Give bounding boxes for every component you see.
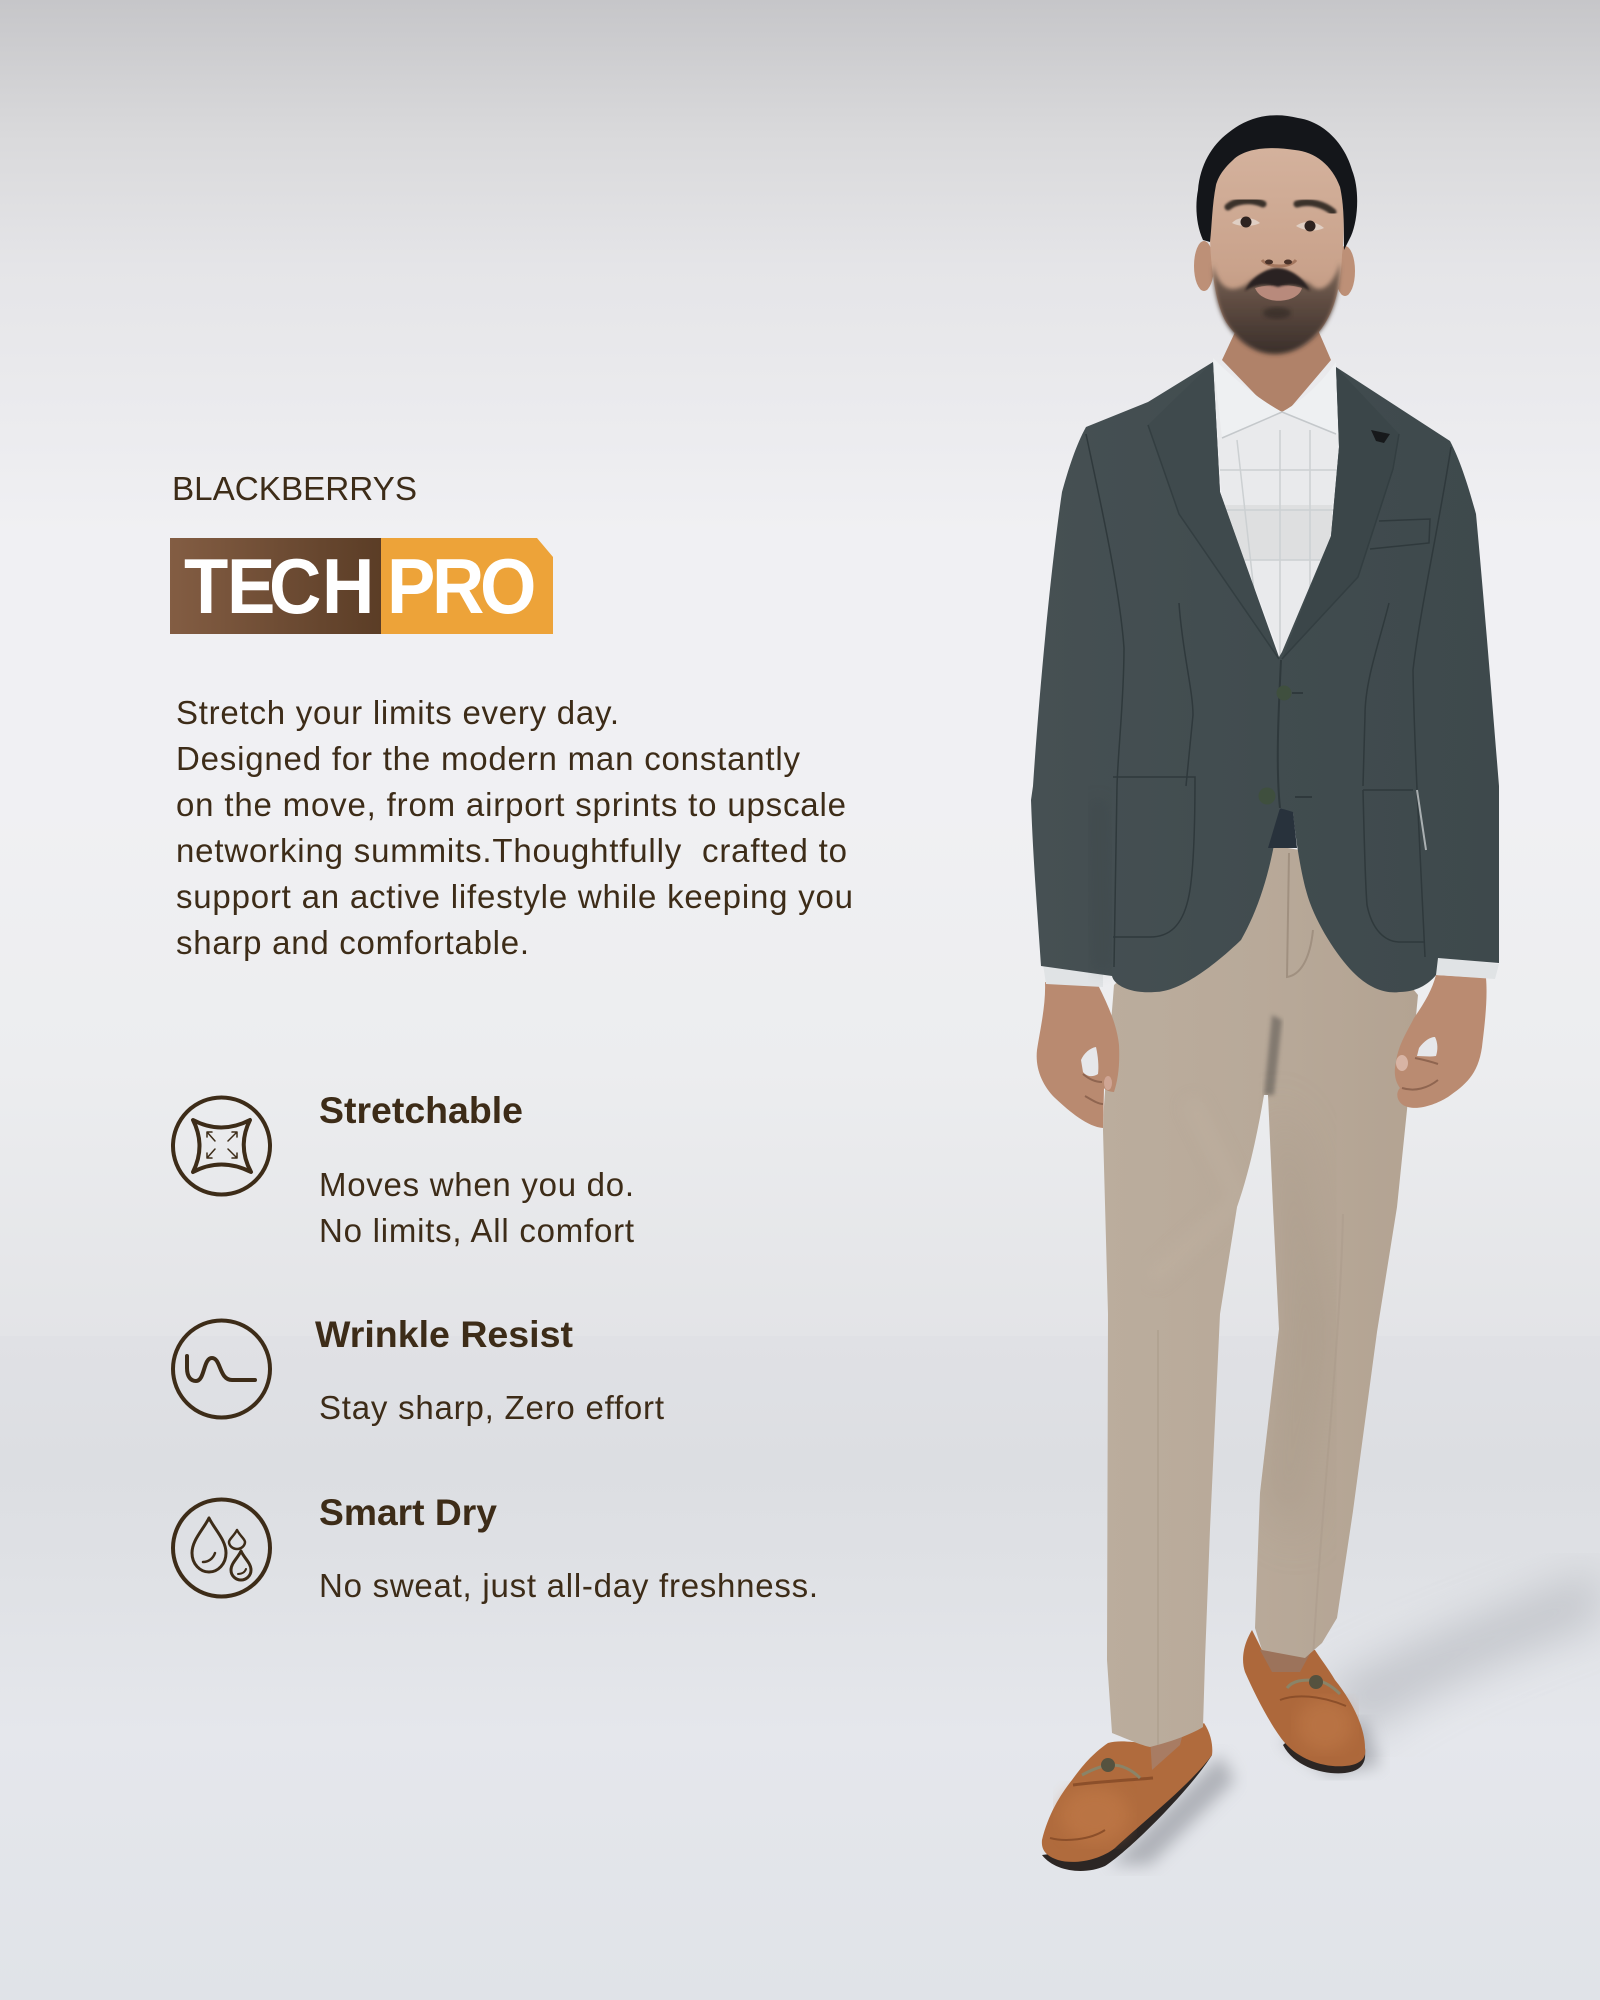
intro paragraph: networking summits.Thoughtfully crafted to <box>176 832 847 869</box>
mouth and mustache <box>1245 268 1310 301</box>
logo: Tech Pro badge: TECH <box>184 543 374 630</box>
beard <box>1213 262 1340 354</box>
icon: stretch fabric <box>173 1098 270 1194</box>
intro paragraph: on the move, from airport sprints to upscale <box>176 786 846 823</box>
right shoe <box>1243 1630 1365 1773</box>
chinos <box>1103 845 1418 1747</box>
icon: water drops <box>173 1500 270 1596</box>
gap between right sleeve and body <box>1417 790 1426 850</box>
blazer buttons <box>1258 686 1292 804</box>
hair <box>1196 115 1357 250</box>
shoes <box>1042 1630 1365 1871</box>
lapel pin <box>1371 430 1390 443</box>
head <box>1194 115 1357 354</box>
intro paragraph <box>176 694 853 961</box>
intro paragraph: sharp and comfortable. <box>176 924 529 961</box>
floor shadows <box>1110 1570 1600 1865</box>
left shoe <box>1042 1723 1212 1871</box>
belt <box>1268 808 1297 848</box>
hands <box>1037 975 1487 1128</box>
blazer lapels <box>1148 362 1399 659</box>
feature: wrinkle resist <box>173 1313 664 1426</box>
heading: Smart Dry: Smart Dry <box>319 1491 497 1533</box>
description: Stretchable: No limits, All comfort <box>319 1212 634 1249</box>
description: Wrinkle Resist: Stay sharp, Zero effort <box>319 1389 664 1426</box>
trouser shading <box>1150 853 1343 1747</box>
eyes <box>1232 216 1324 232</box>
description: Stretchable <box>319 1166 634 1249</box>
icon: wave flattening <box>173 1320 270 1418</box>
sleeve shading <box>1090 800 1110 970</box>
description: Stretchable: Moves when you do. <box>319 1166 634 1203</box>
description: Smart Dry: No sweat, just all-day freshness. <box>319 1567 818 1604</box>
left hand <box>1037 982 1119 1128</box>
heading: Wrinkle Resist: Wrinkle Resist <box>315 1313 574 1355</box>
blazer <box>1031 362 1499 992</box>
intro paragraph: support an active lifestyle while keeping you <box>176 878 853 915</box>
feature: smart dry <box>173 1491 818 1604</box>
logo: Tech Pro badge <box>170 538 553 634</box>
shirt <box>1213 358 1342 660</box>
logo: Tech Pro badge: PRO <box>387 543 536 630</box>
photo: model in blazer and chinos <box>1031 115 1600 1871</box>
brows <box>1228 201 1333 212</box>
neck <box>1222 330 1331 420</box>
nose <box>1262 260 1296 266</box>
brand name: BLACKBERRYS <box>172 470 417 507</box>
intro paragraph: Stretch your limits every day. <box>176 694 619 731</box>
seams and pockets <box>1086 434 1451 967</box>
intro paragraph: Designed for the modern man constantly <box>176 740 800 777</box>
right hand <box>1395 975 1487 1108</box>
feature: stretchable <box>173 1089 634 1249</box>
shirt cuffs <box>1043 956 1499 987</box>
ears <box>1194 241 1355 296</box>
heading: Stretchable: Stretchable <box>319 1089 523 1131</box>
face <box>1209 146 1344 353</box>
